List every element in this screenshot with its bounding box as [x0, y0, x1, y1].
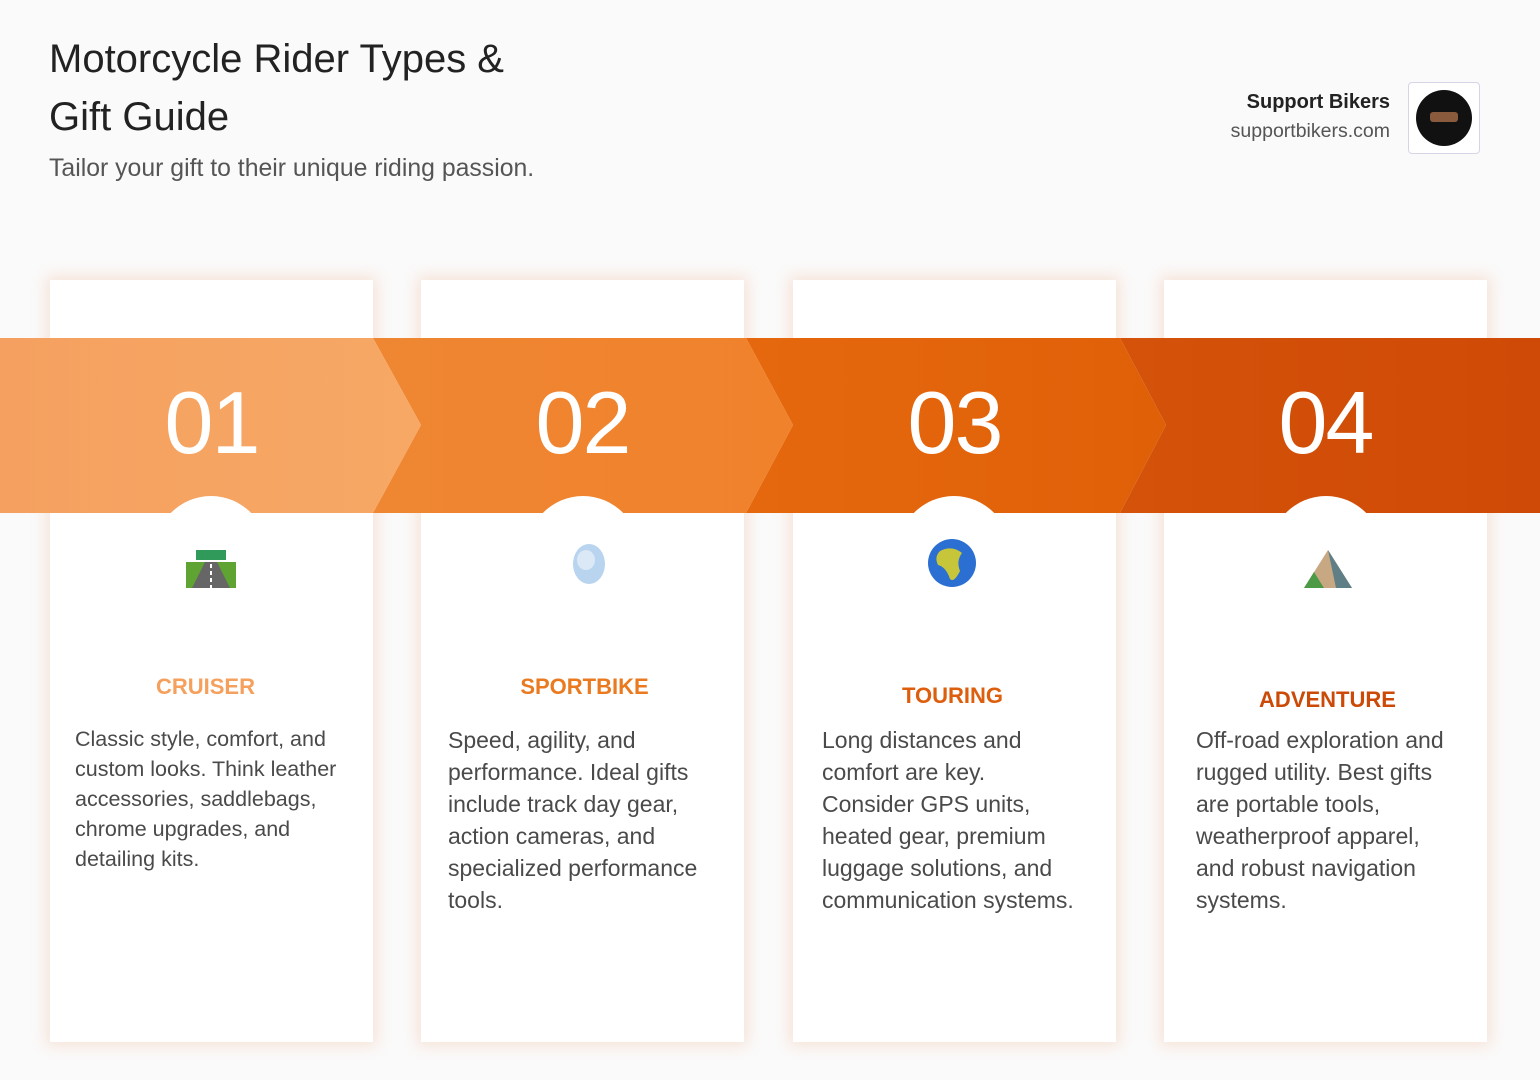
- icon: mountain: [1304, 550, 1352, 588]
- brand url: supportbikers.com: [1231, 120, 1390, 142]
- panel: touring: [822, 683, 1074, 913]
- panel: sportbike: Speed, agility, and: [448, 727, 636, 753]
- panel: sportbike: tools.: [448, 887, 503, 913]
- text: 02: [536, 373, 629, 472]
- panel: touring: luggage solutions, and: [822, 855, 1052, 881]
- numbers: 01: [165, 373, 258, 472]
- icon: wind: [573, 544, 605, 584]
- panel: adventure: [1196, 687, 1444, 913]
- panel: touring: heated gear, premium: [822, 823, 1046, 849]
- panel: sportbike: action cameras, and: [448, 823, 655, 849]
- panel: adventure: weatherproof apparel,: [1196, 823, 1420, 849]
- panel: cruiser: chrome upgrades, and: [75, 817, 290, 841]
- panel: touring: communication systems.: [822, 887, 1074, 913]
- panel: cruiser: custom looks. Think leather: [75, 757, 336, 781]
- panel: cruiser: accessories, saddlebags,: [75, 787, 316, 811]
- panel: adventure: Off-road exploration and: [1196, 727, 1444, 753]
- panel: touring: TOURING: [902, 683, 1003, 708]
- panel: adventure: and robust navigation: [1196, 855, 1416, 881]
- icon: highway: [186, 550, 236, 588]
- panel: adventure: are portable tools,: [1196, 791, 1380, 817]
- text: 03: [908, 373, 1001, 472]
- icon: globe: [928, 539, 976, 587]
- panel: touring: Consider GPS units,: [822, 791, 1030, 817]
- panel: cruiser: Classic style, comfort, and: [75, 727, 326, 751]
- title: Motorcycle Rider Types &: [49, 37, 504, 81]
- panel: adventure: ADVENTURE: [1259, 687, 1396, 712]
- brand name: Support Bikers: [1247, 91, 1390, 113]
- panel: touring: comfort are key.: [822, 759, 985, 785]
- panel: sportbike: SPORTBIKE: [520, 674, 649, 699]
- logo: [1408, 82, 1480, 154]
- panel: sportbike: performance. Ideal gifts: [448, 759, 688, 785]
- panel: touring: Long distances and: [822, 727, 1022, 753]
- panel: cruiser: [75, 674, 336, 871]
- brand block: [1231, 82, 1480, 154]
- bumps: [155, 496, 267, 608]
- panel: sportbike: specialized performance: [448, 855, 697, 881]
- panel: sportbike: [448, 674, 697, 913]
- title: [49, 37, 504, 139]
- title: Gift Guide: [49, 95, 229, 139]
- chevron band: [0, 338, 1540, 513]
- panel: cruiser: CRUISER: [156, 674, 255, 699]
- subtitle: Tailor your gift to their unique riding passion.: [49, 155, 534, 182]
- panel: cruiser: detailing kits.: [75, 847, 199, 871]
- text: 04: [1279, 373, 1372, 472]
- panel: adventure: systems.: [1196, 887, 1287, 913]
- panel: sportbike: include track day gear,: [448, 791, 678, 817]
- cards: [50, 280, 373, 1042]
- panel: adventure: rugged utility. Best gifts: [1196, 759, 1432, 785]
